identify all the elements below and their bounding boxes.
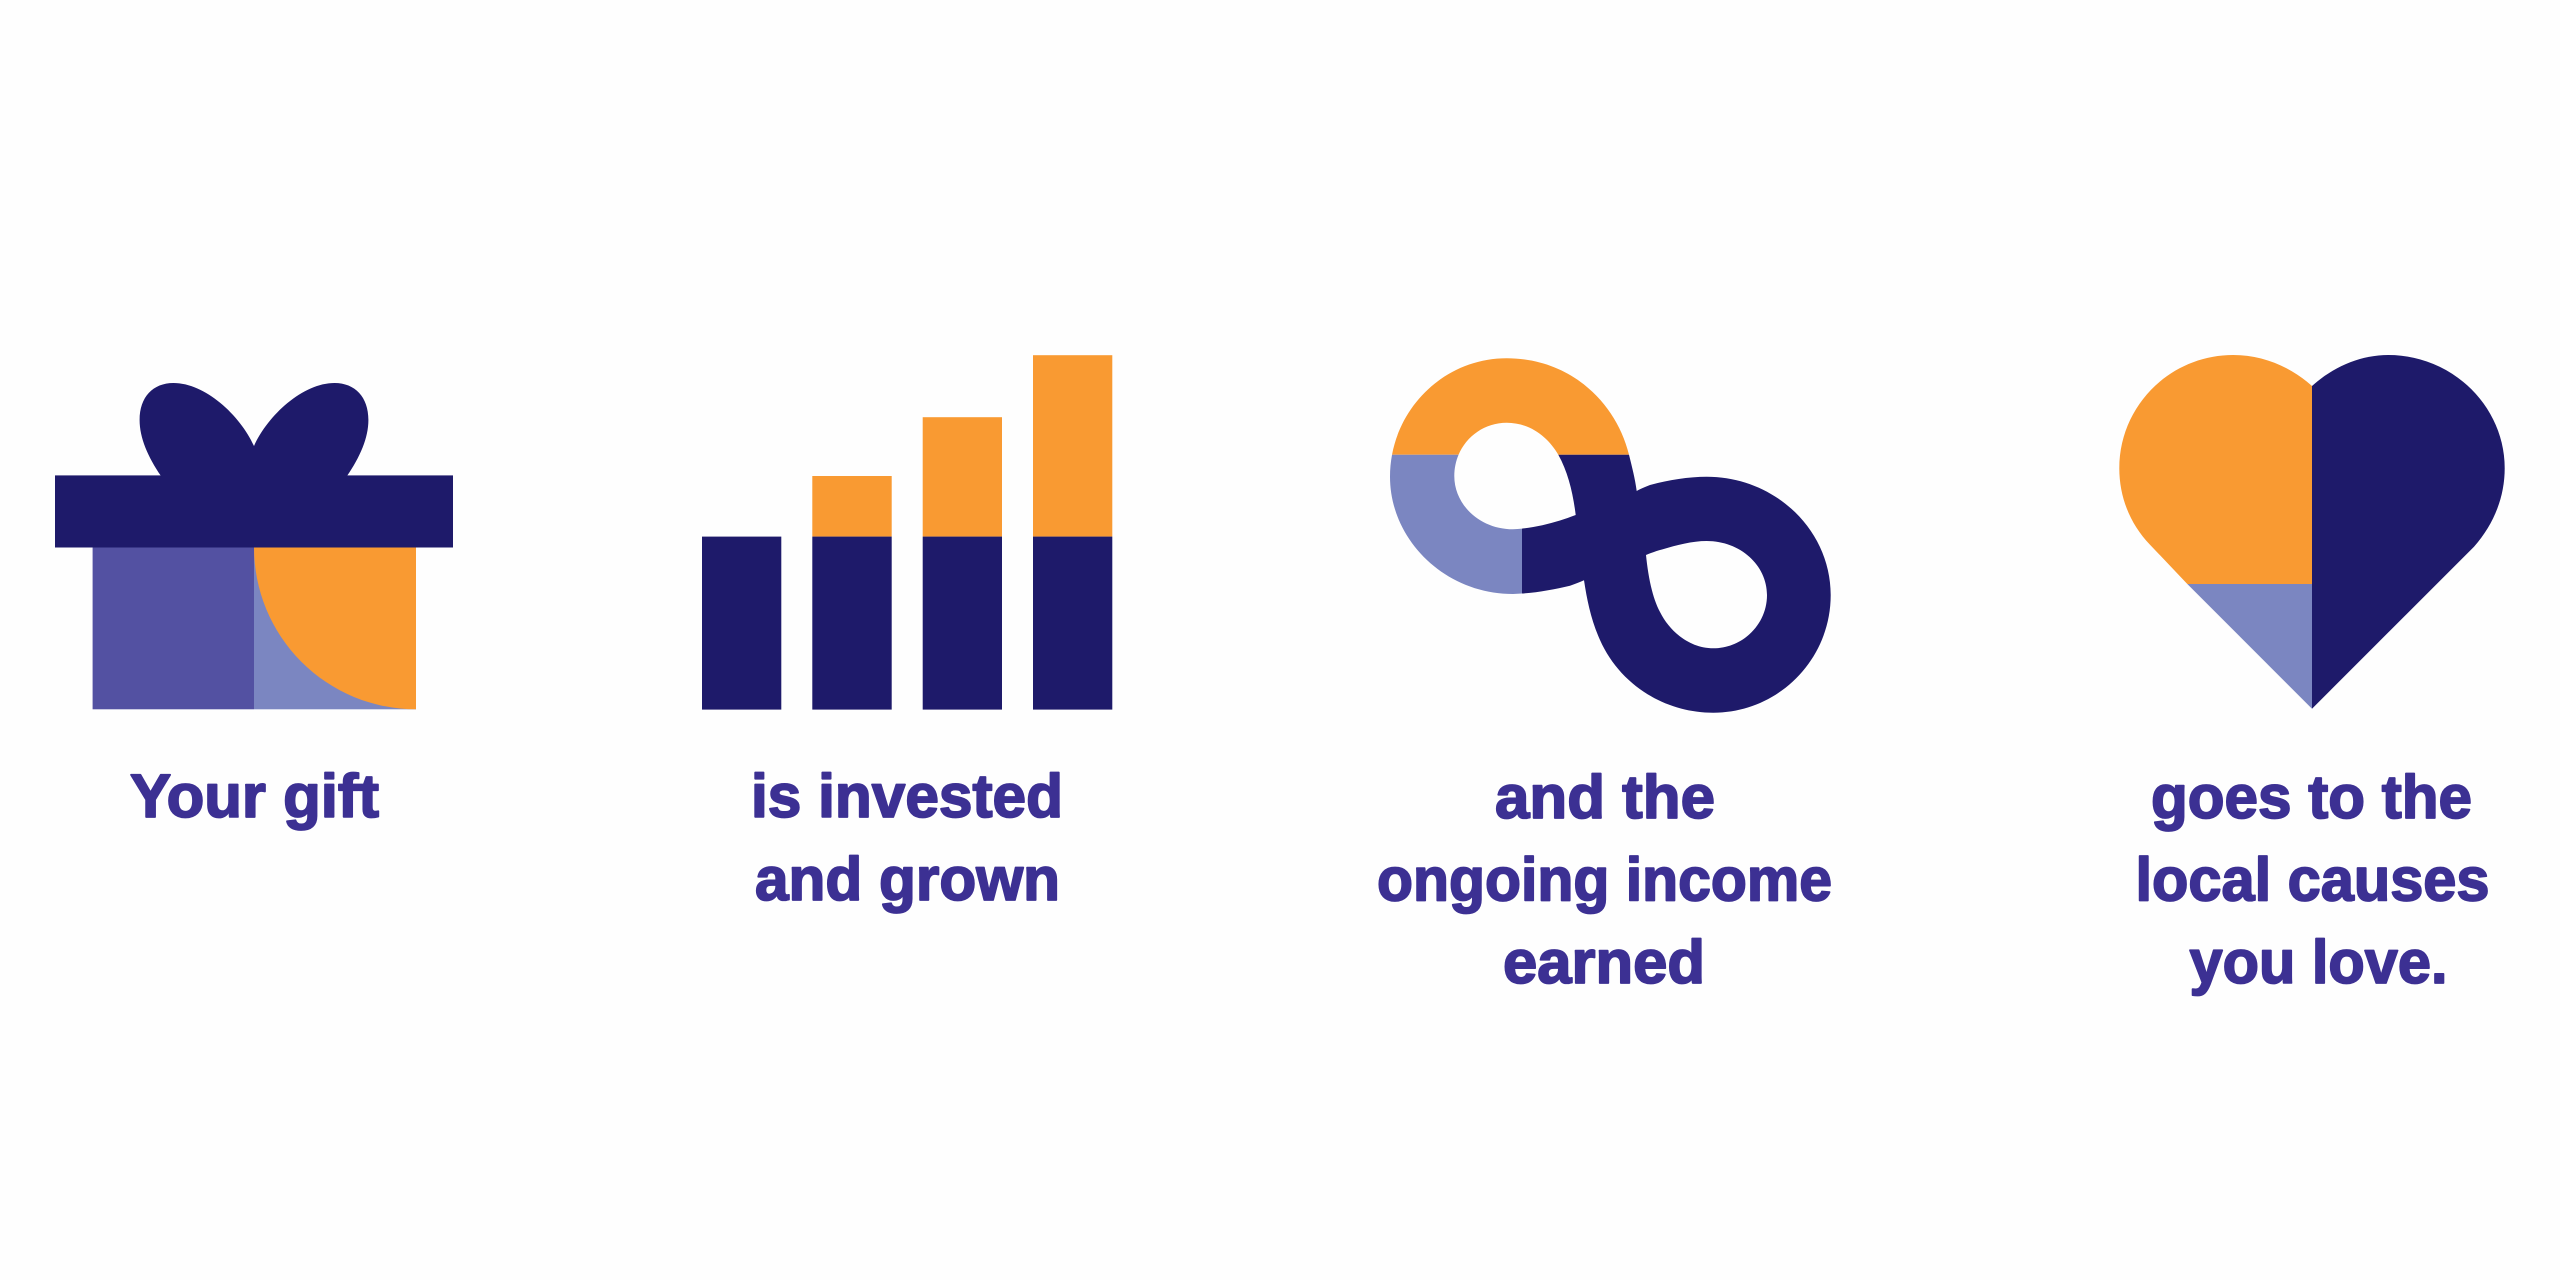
caption: goes to the local causes you love: you love. bbox=[2190, 928, 2448, 996]
gift lid bbox=[55, 475, 453, 548]
gift bow bbox=[140, 383, 368, 476]
panel: is invested and grown bbox=[702, 355, 1112, 913]
heart navy half bbox=[2312, 355, 2505, 709]
caption: and the ongoing income earned: ongoing income bbox=[1377, 846, 1832, 914]
caption: is invested and grown bbox=[751, 762, 1063, 913]
panel: ongoing income bbox=[1377, 358, 1832, 996]
caption: is invested and grown: and grown bbox=[755, 845, 1060, 913]
panel: your gift bbox=[55, 383, 453, 830]
gift body left side bbox=[93, 547, 254, 709]
icon: infinity symbol bbox=[1390, 358, 1831, 713]
bar 2 bbox=[812, 476, 892, 710]
caption: and the ongoing income earned: and the bbox=[1495, 763, 1715, 831]
gift orange quarter circle bbox=[254, 547, 416, 709]
panel: local causes bbox=[2119, 355, 2505, 996]
bar 4 bbox=[1033, 355, 1112, 710]
caption: and the ongoing income earned: earned bbox=[1503, 928, 1705, 996]
icon: heart bbox=[2119, 355, 2505, 709]
bar 3 bbox=[923, 417, 1002, 710]
caption: is invested and grown: is invested bbox=[751, 762, 1063, 830]
icon: gift box bbox=[55, 383, 453, 709]
caption: and the ongoing income earned bbox=[1377, 763, 1832, 996]
caption: your gift: Your gift bbox=[130, 762, 379, 830]
heart orange segment bbox=[2119, 355, 2312, 584]
gift body right side bbox=[254, 547, 416, 709]
caption: goes to the local causes you love: goes to the bbox=[2151, 763, 2472, 831]
heart light segment bbox=[2187, 584, 2312, 709]
bar chart bbox=[702, 355, 1112, 710]
caption: goes to the local causes you love bbox=[2136, 763, 2490, 996]
caption: goes to the local causes you love: local causes bbox=[2136, 846, 2490, 914]
bar 1 bbox=[702, 537, 781, 710]
